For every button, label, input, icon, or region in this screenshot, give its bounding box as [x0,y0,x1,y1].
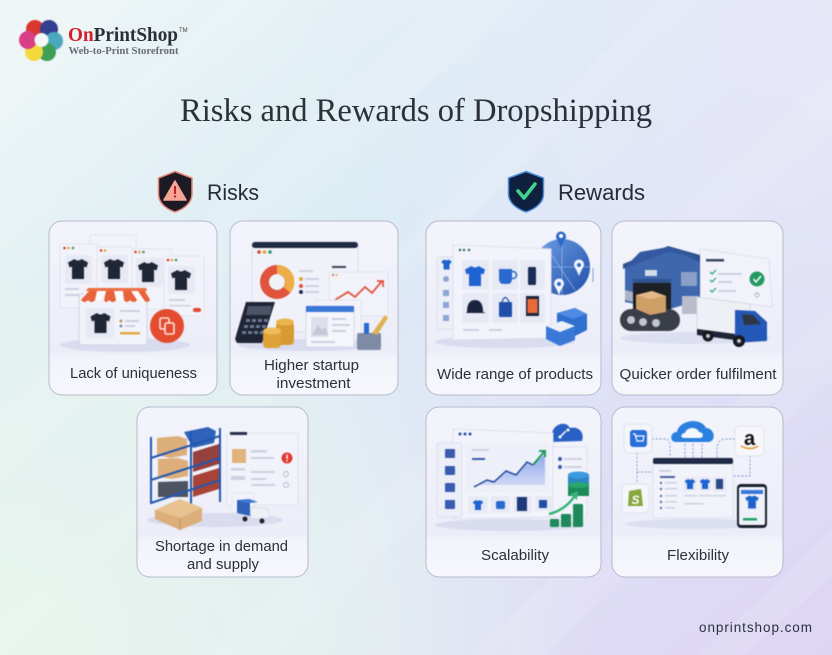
illustration: warehouse shelf and stock alert [147,427,298,530]
rewards label: Rewards [558,180,645,205]
logo mark [19,20,63,61]
label [264,358,359,392]
logo tagline: Web-to-Print Storefront [68,46,179,57]
panel: quicker order fulfilment [612,221,783,395]
illustration: storefront windows [60,235,204,352]
label: Wide range of products [437,367,593,383]
label: and supply [187,557,260,573]
heading: risks [158,172,259,212]
illustration: connected sales channels [622,421,767,529]
label: Lack of uniqueness [70,366,197,382]
label: Quicker order fulfilment [620,367,776,383]
icon: check shield [508,172,544,212]
label: Flexibility [667,548,730,564]
logo wordmark: OnPrintShop [68,25,178,46]
label [155,539,288,573]
label: investment [276,376,350,392]
illustration: product catalog and globe [435,232,593,348]
logo [19,20,188,61]
label: Higher startup [264,358,359,374]
label: Scalability [481,548,550,564]
panel: lack of uniqueness [49,221,217,395]
risks label: Risks [207,180,259,205]
illustration: growth dashboard [435,424,589,531]
icon: warning shield [158,172,192,212]
illustration: connected sales channels: a [744,428,756,450]
illustration: warehouse, conveyor and truck [620,246,772,347]
panel: higher startup investment [230,221,398,395]
label: Shortage in demand [155,539,288,555]
illustration: dashboard, calculator, coins [235,242,388,351]
heading: rewards [508,172,645,212]
illustration: connected sales channels: S [631,493,640,507]
panel: shortage in demand and supply [137,407,308,577]
panel: flexibility [612,407,783,577]
title: Risks and Rewards of Dropshipping [180,93,652,129]
website url: onprintshop.com [699,620,812,635]
logo trademark: TM [179,28,188,34]
panel: wide range of products [426,221,601,395]
panel: scalability [426,407,601,577]
